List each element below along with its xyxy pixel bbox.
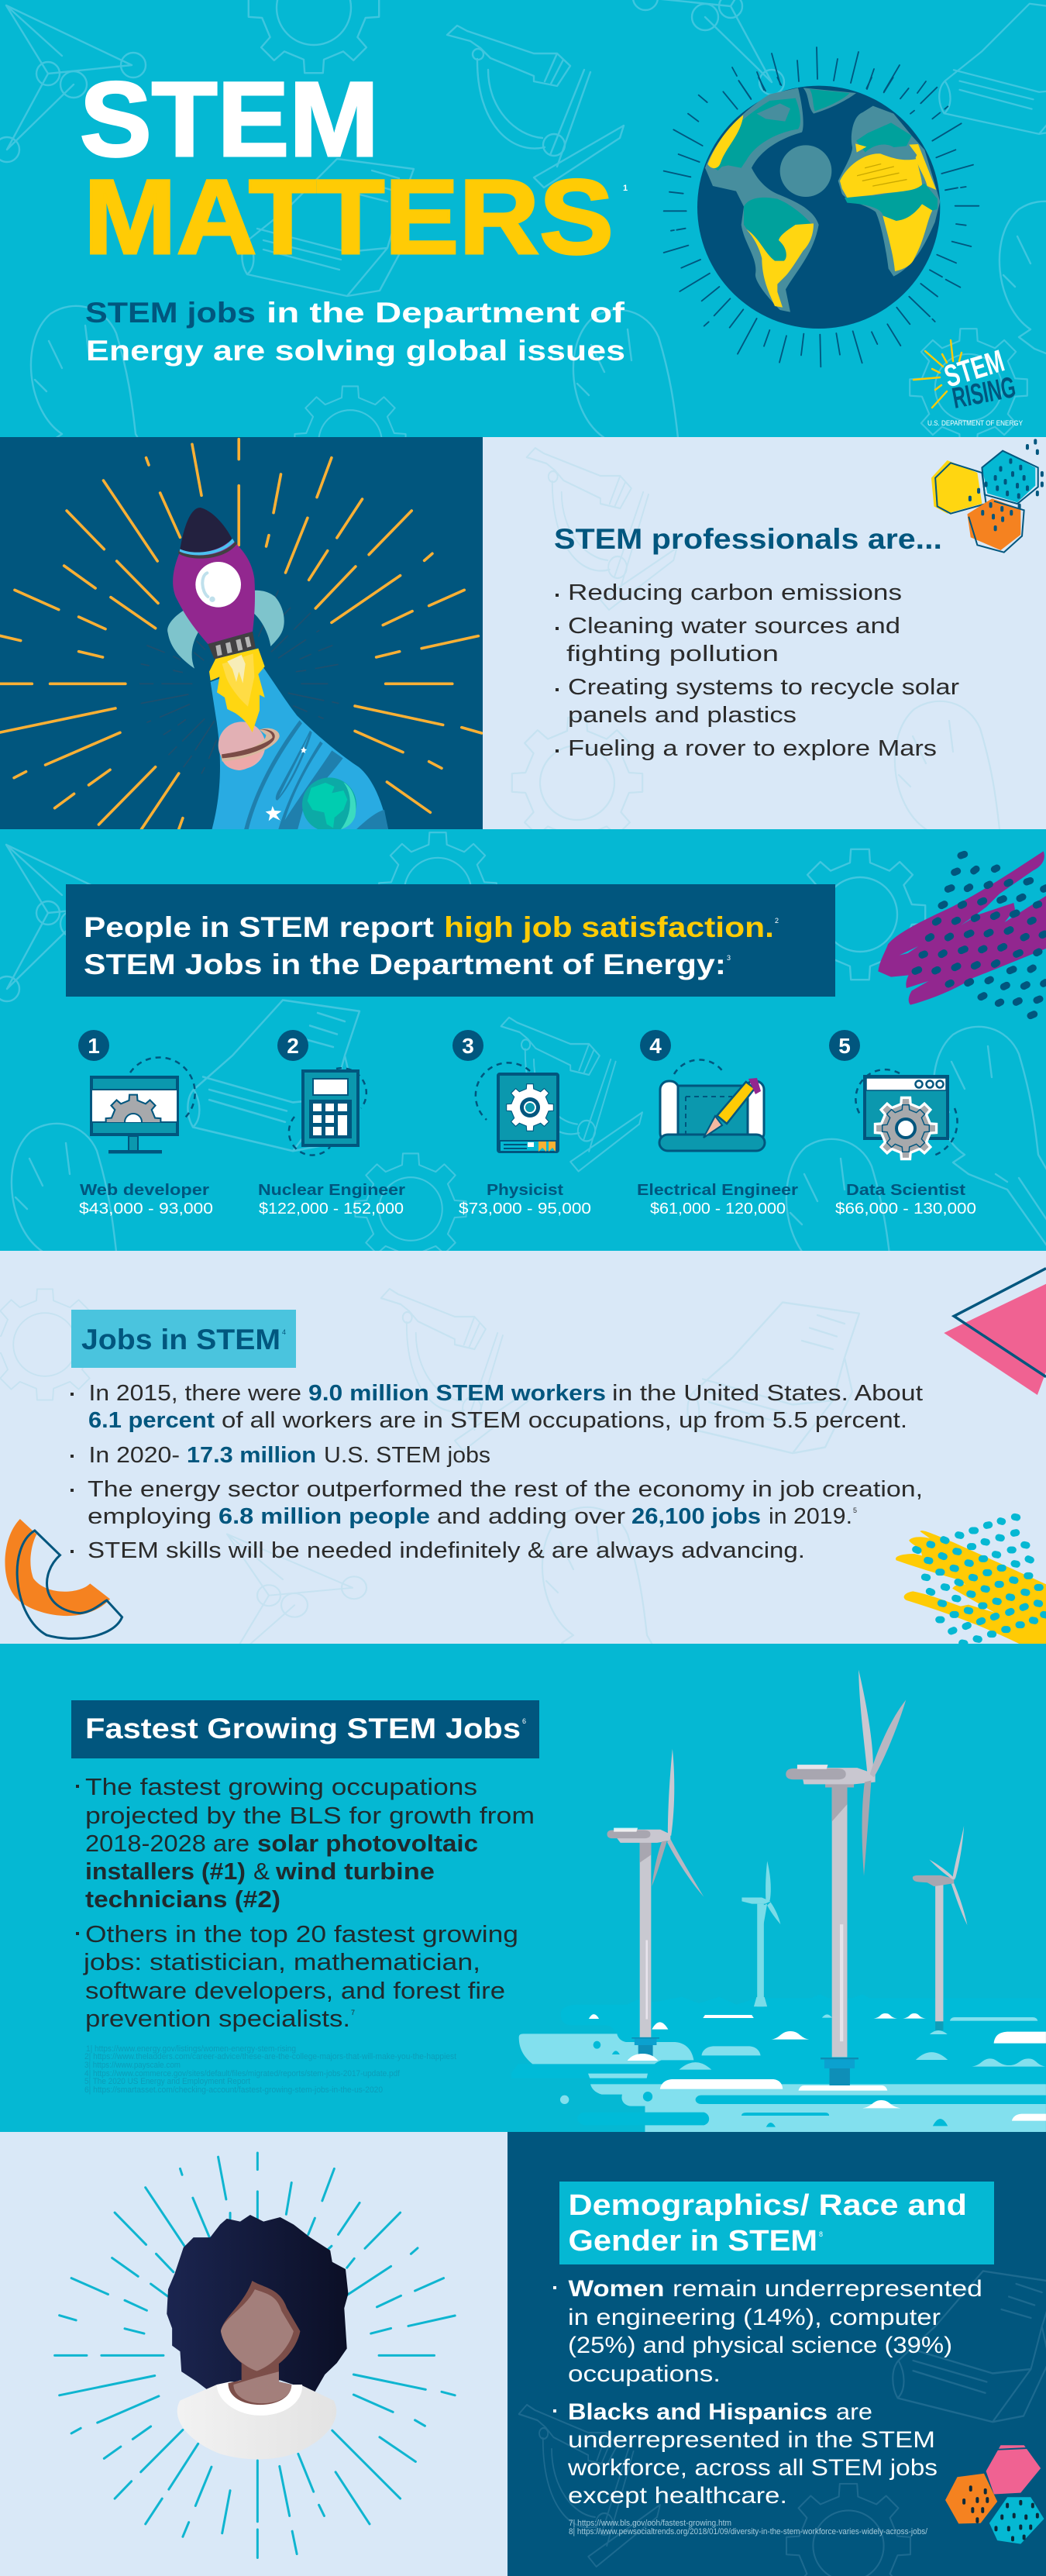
rocket trail	[211, 664, 389, 832]
bullet list: U.S. STEM jobs	[324, 1443, 490, 1468]
job 3: physicist: Physicist	[487, 1182, 563, 1199]
bullet list: except healthcare.	[568, 2483, 787, 2509]
bullet list: In 2020-	[88, 1443, 180, 1468]
bullet list: The fastest growing occupations	[85, 1773, 477, 1800]
subtitle: in the Department of	[267, 297, 625, 329]
sources: 1| https://www.energy.gov/listings/women-energy-stem-rising	[86, 2044, 296, 2054]
bullet list: fighting pollution	[566, 642, 779, 666]
logo: STEM Rising: U.S. DEPARTMENT OF ENERGY	[927, 419, 1024, 428]
job 3: physicist	[452, 1030, 591, 1217]
bullet list	[553, 2276, 982, 2509]
rocket body	[173, 541, 255, 644]
earth planet	[302, 777, 356, 832]
yellow brush with teal dots	[896, 1517, 1046, 1645]
sources: 2| https://www.theladders.com/career-advice/these-are-the-college-majors-that-will-make-you-the-happiest	[84, 2052, 456, 2061]
title: MATTERS	[84, 158, 614, 277]
bullet list: of all workers are in STEM occupations, up from 5.5 percent.	[222, 1408, 907, 1433]
panel: STEM professionals	[483, 437, 1046, 829]
panel doodles	[0, 1289, 859, 1736]
panel: woman portrait	[0, 2132, 508, 2576]
heading box: 2	[775, 917, 779, 925]
panel: fastest growing jobs	[0, 1644, 1046, 2133]
decorations	[5, 1269, 1046, 1638]
logo: STEM Rising	[914, 340, 1024, 428]
heading box: Gender in STEM	[569, 2225, 817, 2257]
sources: 8| https://www.pewsocialtrends.org/2018/01/09/diversity-in-the-stem-workforce-varies-widely-across-jobs/	[569, 2527, 928, 2536]
teal rays	[55, 2153, 455, 2557]
neck	[228, 2360, 291, 2405]
job 3: physicist: $73,000 - 95,000	[459, 1200, 591, 1217]
job 2: nuclear engineer: 2	[287, 1034, 299, 1058]
light turbine	[741, 1861, 780, 2006]
job 1: web developer: Web developer	[80, 1182, 209, 1199]
big turbine	[786, 1670, 906, 2057]
title	[80, 60, 628, 277]
subtitle: STEM jobs	[85, 297, 256, 329]
job 4: electrical engineer	[637, 1030, 798, 1217]
bullet list: remain underrepresented	[673, 2276, 982, 2302]
bullet list: Reducing carbon emissions	[568, 580, 902, 605]
job 2: nuclear engineer: Nuclear Engineer	[258, 1182, 405, 1199]
job 4: electrical engineer: Electrical Engineer	[637, 1182, 798, 1199]
title: 1	[623, 184, 628, 193]
heading box: 6	[522, 1717, 526, 1725]
job 5: data scientist	[829, 1030, 976, 1217]
orange crescent	[5, 1519, 110, 1616]
job 2: nuclear engineer	[258, 1030, 405, 1217]
yellow rays	[0, 439, 482, 829]
bullet list: technicians (#2)	[85, 1886, 280, 1913]
job 1: web developer	[78, 1030, 213, 1217]
bullet list: are	[836, 2399, 872, 2425]
bullet list: and adding over	[437, 1504, 625, 1529]
bullet list: Women	[569, 2276, 665, 2302]
faint inner rays	[139, 591, 339, 773]
job 5: data scientist: $66,000 - 130,000	[835, 1200, 976, 1217]
bullet list: in 2019.	[769, 1504, 852, 1529]
bullet list: occupations.	[568, 2361, 721, 2387]
panel doodles	[519, 2271, 1046, 2576]
bullet list: software developers, and forest fire	[85, 1977, 505, 2004]
hexagons	[945, 2445, 1044, 2544]
panel: header	[0, 0, 1046, 437]
bullet list: prevention specialists.	[85, 2005, 350, 2032]
bullet list: workforce, across all STEM jobs	[567, 2455, 938, 2481]
sources	[84, 2044, 456, 2095]
hair	[167, 2215, 348, 2392]
rocket engine	[208, 632, 256, 659]
subtitle	[85, 297, 625, 367]
bullet list: Others in the top 20 fastest growing	[85, 1920, 518, 1947]
flame	[209, 649, 265, 732]
body	[177, 2385, 336, 2459]
hexagons	[931, 440, 1042, 553]
heading box: People in STEM report	[84, 911, 434, 943]
bullet list: 26,100 jobs	[631, 1504, 761, 1529]
panel: jobs in STEM	[0, 1251, 1046, 1644]
heading box: Jobs in STEM	[81, 1324, 280, 1355]
heading box: STEM Jobs in the Department of Energy:	[84, 949, 726, 980]
collar	[217, 2381, 302, 2416]
heading box	[66, 884, 835, 997]
turbines	[607, 1670, 967, 2057]
panel: job satisfaction	[0, 829, 1046, 1251]
bullet list: solar photovoltaic	[257, 1830, 478, 1857]
bullet list	[76, 1773, 535, 2032]
face	[221, 2281, 300, 2373]
bullet list: in the United States. About	[612, 1381, 923, 1406]
job 5: data scientist: 5	[838, 1034, 851, 1058]
icon: globe with rays	[664, 47, 979, 367]
panel doodles	[0, 832, 1046, 1368]
bullet list: Fueling a rover to explore Mars	[568, 736, 937, 761]
bullet list: 2018-2028 are	[85, 1830, 249, 1857]
bullet list: Cleaning water sources and	[568, 614, 900, 639]
right turbine	[913, 1826, 967, 2030]
panel: demographics	[508, 2132, 1046, 2576]
heading box: 3	[727, 954, 731, 962]
heading box: 8	[819, 2230, 823, 2238]
bullet list: underrepresented in the STEM	[568, 2427, 935, 2453]
job 1: web developer: 1	[88, 1034, 100, 1058]
heading box	[71, 1700, 539, 1758]
brush decoration	[878, 851, 1046, 1016]
title: STEM	[80, 60, 379, 179]
bullet list: 6.1 percent	[88, 1408, 215, 1433]
sources: 5| The 2020 US Energy and Employment Report	[84, 2077, 250, 2086]
bullet list	[71, 1381, 923, 1563]
panel doodles	[511, 439, 1044, 829]
job 4: electrical engineer: $61,000 - 120,000	[650, 1200, 786, 1217]
bullet list: employing	[88, 1504, 212, 1529]
sources	[569, 2519, 928, 2536]
sea	[511, 1994, 1046, 2133]
heading box: Fastest Growing STEM Jobs	[85, 1713, 521, 1744]
bullet list: Blacks and Hispanics	[568, 2399, 828, 2425]
heading box: high job satisfaction.	[444, 911, 774, 943]
sources: 7| https://www.bls.gov/ooh/fastest-growing.htm	[569, 2519, 731, 2528]
bullet list: panels and plastics	[568, 703, 797, 728]
logo: STEM Rising: STEM	[941, 344, 1008, 394]
sources: 3| https://www.payscale.com	[84, 2061, 181, 2070]
header background doodles	[0, 0, 1046, 539]
sources: 6| https://smartasset.com/checking-account/fastest-growing-stem-jobs-in-the-us-2020	[84, 2085, 383, 2095]
heading box	[71, 1310, 296, 1368]
panel: rocket illustration	[0, 437, 483, 832]
bullet list: 9.0 million STEM workers	[308, 1381, 606, 1406]
heading box: Demographics/ Race and	[569, 2189, 967, 2222]
job 1: web developer: $43,000 - 93,000	[79, 1200, 213, 1217]
sources: 4| https://www.commerce.gov/sites/default/files/migrated/reports/stem-jobs-2017-update.pdf	[84, 2069, 401, 2078]
trail stripes	[243, 720, 389, 832]
subtitle: Energy are solving global issues	[86, 335, 625, 367]
bullet list: 6.8 million people	[218, 1504, 430, 1529]
turbine bases and white wave caps	[589, 2013, 1046, 2121]
bullet list: In 2015, there were	[88, 1381, 301, 1406]
bullet list	[556, 580, 959, 761]
bullet list: 5	[853, 1507, 857, 1514]
job 5: data scientist: Data Scientist	[846, 1182, 965, 1199]
bullet list: jobs: statistician, mathematician,	[83, 1948, 480, 1975]
heading box	[559, 2182, 994, 2264]
rocket nose	[178, 508, 237, 559]
pink triangle	[944, 1284, 1046, 1395]
bullet list: STEM skills will be needed indefinitely & are always advancing.	[88, 1538, 805, 1563]
heading: STEM professionals are...	[554, 523, 942, 555]
job 2: nuclear engineer: $122,000 - 152,000	[259, 1200, 404, 1217]
rocket fins	[167, 591, 284, 669]
rocket window	[195, 562, 241, 608]
bullet list: in engineering (14%), computer	[568, 2305, 941, 2330]
bullet list: (25%) and physical science (39%)	[568, 2333, 952, 2358]
bullet list: projected by the BLS for growth from	[85, 1802, 535, 1829]
job 3: physicist: 3	[462, 1034, 474, 1058]
stars	[266, 746, 307, 821]
bullet list: 7	[351, 2009, 355, 2016]
bullet list: &	[253, 1858, 270, 1885]
heading box: 4	[282, 1328, 286, 1336]
bullet list: Creating systems to recycle solar	[568, 675, 959, 700]
bullet list: The energy sector outperformed the rest of the economy in job creation,	[88, 1477, 923, 1502]
planet with ring	[218, 721, 280, 770]
bullet list: wind turbine	[275, 1858, 435, 1885]
bullet list: 17.3 million	[187, 1443, 316, 1468]
left turbine	[607, 1749, 704, 2037]
job 4: electrical engineer: 4	[649, 1034, 662, 1058]
bullet list: installers (#1)	[85, 1858, 246, 1885]
